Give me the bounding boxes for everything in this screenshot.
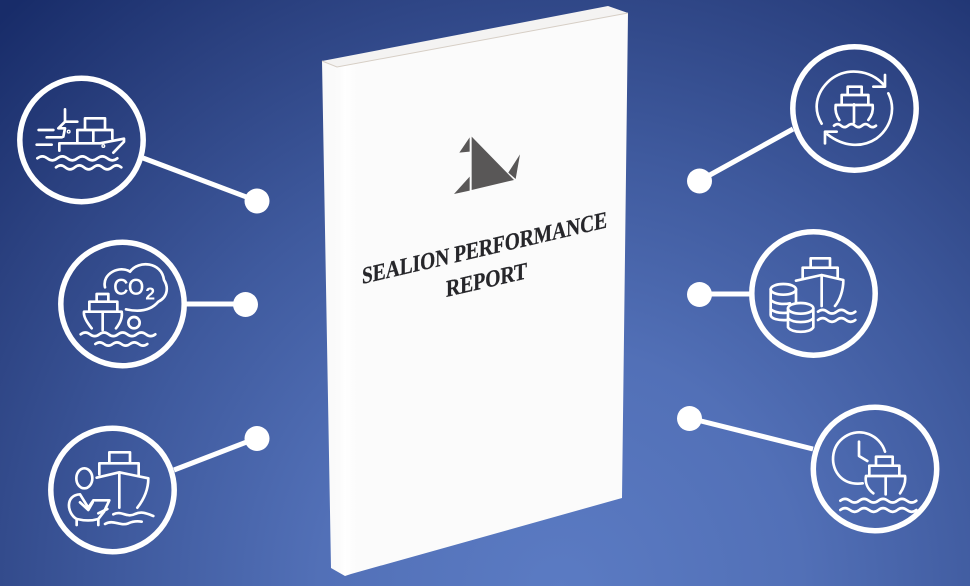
book cover <box>322 13 628 576</box>
ring <box>20 78 143 202</box>
dot <box>233 292 258 317</box>
book title: SEALION PERFORMANCE <box>362 207 607 290</box>
callout: ship finance <box>687 232 875 355</box>
book ridge <box>322 13 628 67</box>
dot <box>244 188 270 214</box>
icon: clock and ship <box>833 432 916 512</box>
icon: ship and coin stacks <box>771 258 855 332</box>
book title: REPORT <box>446 258 527 303</box>
book <box>322 6 628 576</box>
connector <box>689 418 813 449</box>
callout: container ship <box>20 78 269 214</box>
icon: person with checklist and ship <box>69 452 153 525</box>
connector <box>186 302 245 306</box>
icon: container ship <box>37 109 124 169</box>
icon: ship in circular arrows <box>817 72 892 145</box>
icon: ship with CO2 cloud <box>81 264 167 346</box>
callout: ship cycle <box>687 47 916 193</box>
ring <box>61 242 184 366</box>
connector <box>174 438 257 470</box>
logo: origami sea lion <box>454 137 520 194</box>
dot <box>687 282 712 307</box>
ring <box>51 428 174 552</box>
dot <box>677 406 702 431</box>
dot <box>687 168 712 194</box>
ring <box>793 47 916 170</box>
ring <box>813 407 937 531</box>
ring <box>752 232 875 355</box>
callout: crew and ship <box>51 426 269 552</box>
dot <box>244 426 270 451</box>
icon: ship with CO2 cloud: CO <box>113 274 144 299</box>
connector <box>143 158 257 201</box>
callout: ship schedule <box>677 406 937 531</box>
icon: ship with CO2 cloud: 2 <box>145 283 155 303</box>
book top edge <box>322 6 628 67</box>
book title <box>362 207 607 303</box>
connector <box>699 292 750 296</box>
callout: CO2 emissions <box>61 242 258 366</box>
connector <box>699 129 793 181</box>
